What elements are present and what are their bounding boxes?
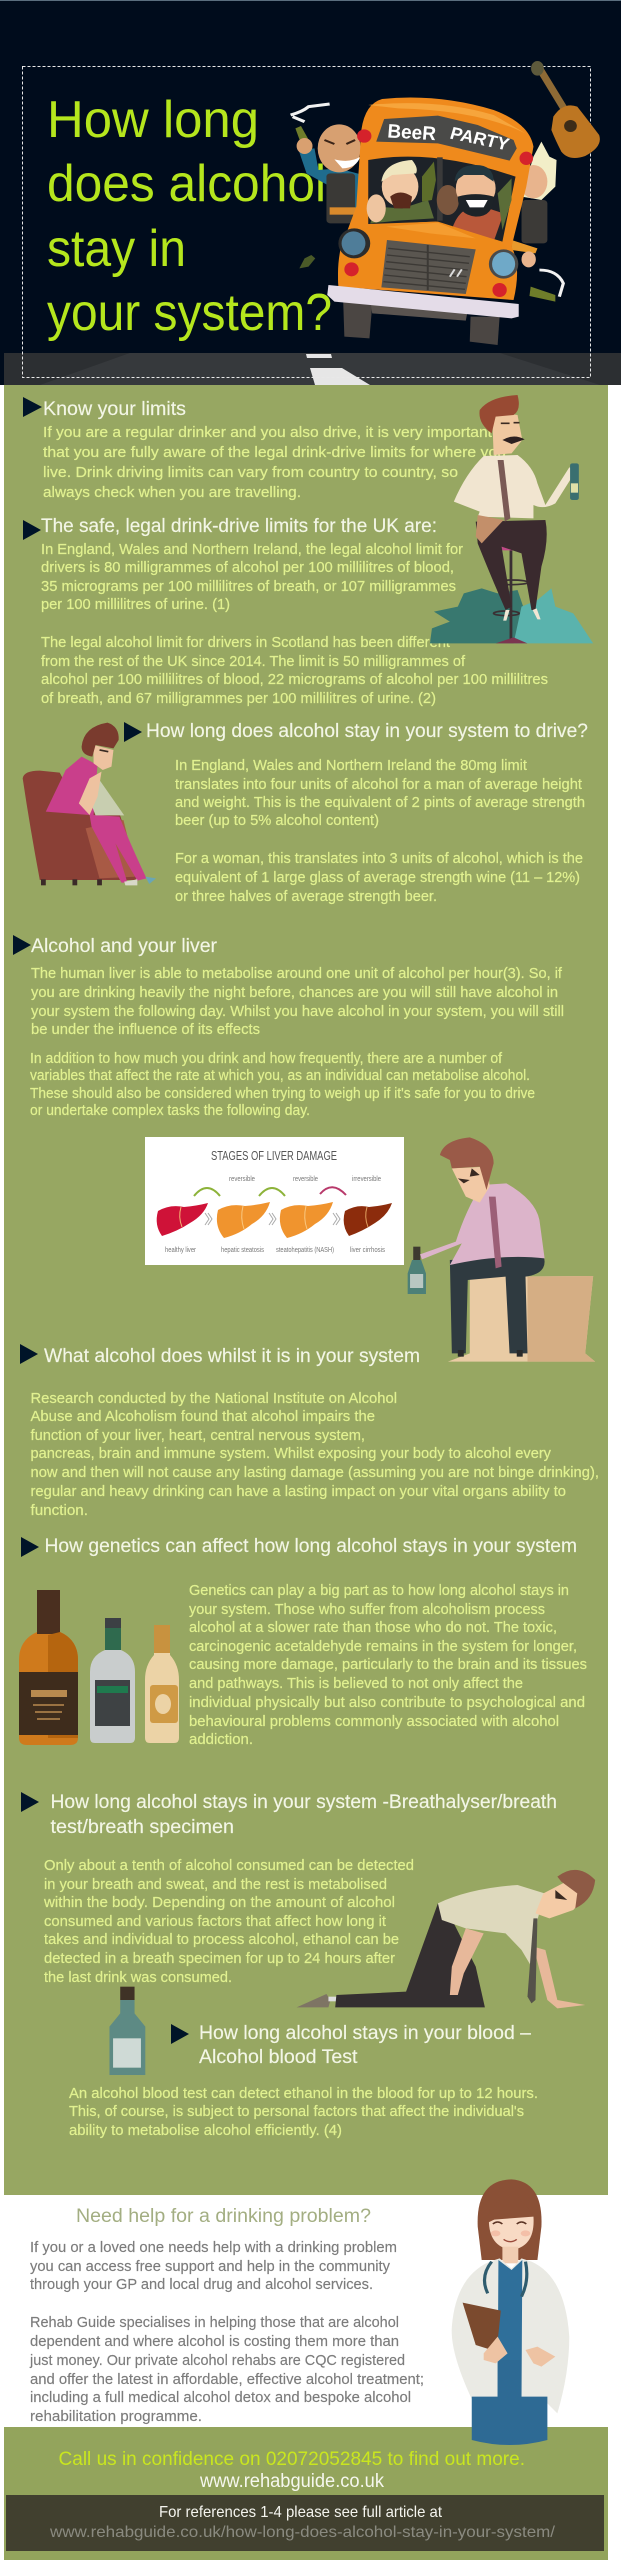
icon: three liquor bottles [19, 1590, 179, 1745]
section: how long to drive: translates into four units of alcohol for a man of average height [175, 777, 582, 793]
section: how long to drive: beer (up to 5% alcohol content) [175, 813, 379, 829]
icon: bottle [109, 1987, 145, 2075]
section: alcohol and your liver: Alcohol and your liver [31, 936, 218, 957]
title: does alcohol [47, 155, 326, 213]
sign [376, 116, 517, 161]
section: know your limits: Know your limits [43, 399, 186, 420]
section: genetics: behavioural problems commonly associated with alcohol [189, 1714, 559, 1730]
title [47, 91, 332, 342]
section: alcohol and your liver: or undertake complex tasks the following day. [30, 1103, 310, 1119]
people in bus [367, 160, 512, 242]
section: breathalyser: How long alcohol stays in your system -Breathalyser/breath [50, 1792, 557, 1813]
chart: stages of liver damage: irreversible [352, 1176, 381, 1183]
section: know your limits: always check when you are travelling. [43, 485, 301, 501]
section: what alcohol does: Abuse and Alcoholism found that alcohol impairs the [30, 1409, 375, 1425]
grille [381, 240, 476, 294]
section: what alcohol does: now and then will not cause any lasting damage (assuming you are not binge drinking), [30, 1465, 599, 1481]
section: how long to drive: and weight. This is the equivalent of 2 pints of average strength [175, 795, 585, 811]
section: breathalyser: Only about a tenth of alcohol consumed can be detected [44, 1858, 414, 1874]
section: alcohol and your liver [13, 935, 564, 1119]
section: need help: through your GP and local drug and alcohol services. [30, 2277, 373, 2293]
section: what alcohol does: Research conducted by the National Institute on Alcohol [30, 1391, 397, 1407]
section: blood test: How long alcohol stays in your blood – [199, 2023, 531, 2044]
icon: doctor [452, 2179, 569, 2445]
section: safe limits: alcohol per 100 millilitres of blood, 22 micrograms of alcohol per 100 millilitres [41, 672, 548, 688]
section: safe limits: drivers is 80 milligrammes of alcohol per 100 millilitres of blood, [41, 560, 454, 576]
sign: BeeR [387, 120, 437, 145]
left man [297, 124, 382, 223]
section: need help: and offer the latest in affordable, effective alcohol treatment; [30, 2372, 424, 2388]
section: safe limits: from the rest of the UK since 2014. The limit is 50 milligrammes of [41, 654, 466, 670]
chart: stages of liver damage: liver cirrhosis [350, 1247, 385, 1254]
section: safe limits: of breath, and 67 milligrammes per 100 millilitres of urine. (2) [41, 691, 436, 707]
section: alcohol and your liver: variables that affect the rate at which you, as an individual can metabolise alcohol. [30, 1068, 530, 1084]
title: your system? [47, 284, 332, 342]
icon: crawling man [297, 1870, 595, 2008]
section: blood test: This, of course, is subject to personal factors that affect the individual's [69, 2104, 524, 2120]
section: know your limits: that you are fully aware of the legal drink-drive limits for where you [43, 445, 506, 461]
section: genetics: and pathways. This is believed to not only affect the [189, 1676, 523, 1692]
bottle: cream [145, 1625, 179, 1743]
section: need help: Need help for a drinking problem? [76, 2206, 371, 2227]
bottle: silver [90, 1618, 135, 1743]
chart: stages of liver damage: reversible [293, 1176, 318, 1183]
section: genetics: alcohol at a slower rate than those who do not. The toxic, [189, 1620, 557, 1636]
section: breathalyser: takes and individual to process alcohol, ethanol can be [44, 1932, 399, 1948]
section: breathalyser: test/breath specimen [50, 1817, 234, 1838]
section: alcohol and your liver: your system the following day. Whilst you have alcohol in your system, you will still [31, 1004, 564, 1020]
section: blood test [69, 2023, 538, 2139]
section: breathalyser: in your breath and sweat, and the rest is metabolised [44, 1877, 387, 1893]
liver: steatohepatitis [280, 1202, 333, 1238]
section: alcohol and your liver: you are drinking heavily the night before, chances are you will still have alcohol in [31, 985, 558, 1001]
windshield [368, 157, 516, 242]
chart: stages of liver damage: healthy liver [165, 1247, 197, 1254]
title: How long [47, 91, 259, 149]
section: what alcohol does: pancreas, brain and immune system. Whilst exposing your body to alcohol every [30, 1446, 552, 1462]
sign: PARTY [448, 124, 511, 155]
section: breathalyser [21, 1792, 557, 1986]
section: genetics: individual physically but also contribute to psychological and [189, 1695, 585, 1711]
section: need help: just money. Our private alcohol rehabs are CQC registered [29, 2353, 405, 2369]
section: genetics: causing more damage, particularly to the brain and its tissues [189, 1657, 587, 1673]
section: know your limits: If you are a regular drinker and you also drive, it is very important [43, 425, 492, 441]
section: how long to drive: equivalent of 1 large glass of average strength wine (11 – 12%) [175, 870, 580, 886]
section: how long to drive: For a woman, this translates into 3 units of alcohol, which is the [175, 851, 583, 867]
wheels [343, 300, 372, 338]
section: blood test: Alcohol blood Test [199, 2047, 358, 2068]
section: safe limits: The safe, legal drink-drive limits for the UK are: [41, 516, 437, 537]
section: how long to drive: In England, Wales and Northern Ireland the 80mg limit [175, 758, 527, 774]
section: alcohol and your liver: The human liver is able to metabolise around one unit of alcohol per hour(3). So, if [31, 966, 563, 982]
panel: call to action: www.rehabguide.co.uk [199, 2471, 384, 2492]
section: safe limits: per 100 millilitres of urine. (1) [41, 597, 230, 613]
section: need help: you can access free support and help in the community [30, 2259, 391, 2275]
section: what alcohol does [20, 1344, 599, 1519]
section: genetics [21, 1536, 587, 1748]
splash and bottles [291, 104, 330, 122]
title: stay in [47, 220, 186, 278]
section: genetics: your system. Those who suffer from alcoholism process [189, 1602, 545, 1618]
section: what alcohol does: regular and heavy drinking can have a lasting impact on your vital organs ability to [30, 1484, 566, 1500]
section: blood test: An alcohol blood test can detect ethanol in the blood for up to 12 hours. [69, 2086, 538, 2102]
section: alcohol and your liver: be under the influence of its effects [31, 1022, 260, 1038]
section: know your limits [23, 397, 506, 501]
section: genetics: How genetics can affect how long alcohol stays in your system [44, 1536, 577, 1557]
section: safe limits: The legal alcohol limit for drivers in Scotland has been different [41, 635, 450, 651]
section: alcohol and your liver: In addition to how much you drink and how frequently, there are a number of [30, 1051, 503, 1067]
road [4, 353, 621, 385]
section: need help: rehabilitation programme. [30, 2409, 202, 2425]
section: need help [29, 2206, 424, 2425]
liver: cirrhosis [344, 1203, 392, 1236]
panel: call to action: Call us in confidence on 02072052845 to find out more. [58, 2449, 525, 2470]
panel: header [0, 0, 621, 385]
bus body [338, 98, 533, 300]
lights [338, 129, 533, 297]
section: what alcohol does: What alcohol does whilst it is in your system [44, 1346, 420, 1367]
section: breathalyser: consumed and various factors that affect how long it [44, 1914, 386, 1930]
guitar [531, 61, 600, 158]
references box [6, 2495, 604, 2551]
section: what alcohol does: function of your liver, heart, central nervous system, [30, 1428, 365, 1444]
icon: beer party bus [291, 61, 600, 345]
section: how long to drive: or three halves of average strength beer. [175, 889, 437, 905]
hood [338, 222, 514, 297]
icon: man in armchair [23, 723, 156, 885]
chart: stages of liver damage: reversible [229, 1176, 255, 1183]
section: what alcohol does: function. [30, 1503, 88, 1519]
bumper [327, 285, 519, 318]
chart: stages of liver damage: STAGES OF LIVER DAMAGE [211, 1148, 337, 1163]
section: genetics: Genetics can play a big part as to how long alcohol stays in [189, 1583, 569, 1599]
section: alcohol and your liver: These should also be considered when trying to weigh up if it's safe for you to drive [30, 1086, 535, 1102]
icon: man on stool with bottle [430, 395, 593, 643]
section: safe limits: 35 micrograms per 100 millilitres of breath, or 107 milligrammes [41, 579, 456, 595]
panel: main green [4, 385, 608, 2195]
section: genetics: addiction. [189, 1732, 253, 1748]
section: blood test: ability to metabolise alcohol efficiently. (4) [69, 2123, 342, 2139]
section: breathalyser: the last drink was consumed. [44, 1970, 232, 1986]
liver: healthy [157, 1203, 208, 1236]
section: need help: dependent and where alcohol is costing them more than [30, 2334, 399, 2350]
chart: stages of liver damage: steatohepatitis (NASH) [276, 1247, 334, 1254]
section: breathalyser: detected in a breath specimen for up to 24 hours after [44, 1951, 395, 1967]
section: need help: Rehab Guide specialises in helping those that are alcohol [30, 2315, 399, 2331]
section: safe limits [23, 516, 548, 707]
icon: man sitting on boxes [408, 1137, 595, 1362]
references box: www.rehabguide.co.uk/how-long-does-alcohol-stay-in-your-system/ [49, 2524, 556, 2541]
section: how long to drive: How long does alcohol stay in your system to drive? [146, 721, 588, 742]
chart: stages of liver damage: hepatic steatosis [221, 1247, 264, 1254]
chart: stages of liver damage [145, 1137, 404, 1265]
right man [512, 142, 557, 267]
section: breathalyser: within the body. Depending on the amount of alcohol [43, 1895, 395, 1911]
liver: hepatic steatosis [217, 1202, 270, 1238]
section: know your limits: live. Drink driving limits can vary from country to country, so [43, 465, 458, 481]
section: need help: including a full medical alcohol detox and bespoke alcohol [30, 2390, 411, 2406]
references box: For references 1-4 please see full article at [159, 2504, 443, 2521]
section: genetics: carcinogenic acetaldehyde remains in the system for longer, [189, 1639, 577, 1655]
panel: call to action [4, 2427, 608, 2560]
section: safe limits: In England, Wales and Northern Ireland, the legal alcohol limit for [41, 542, 463, 558]
section: need help: If you or a loved one needs help with a drinking problem [30, 2240, 397, 2256]
bottle: whisky [19, 1590, 78, 1745]
section: how long to drive [124, 721, 588, 905]
